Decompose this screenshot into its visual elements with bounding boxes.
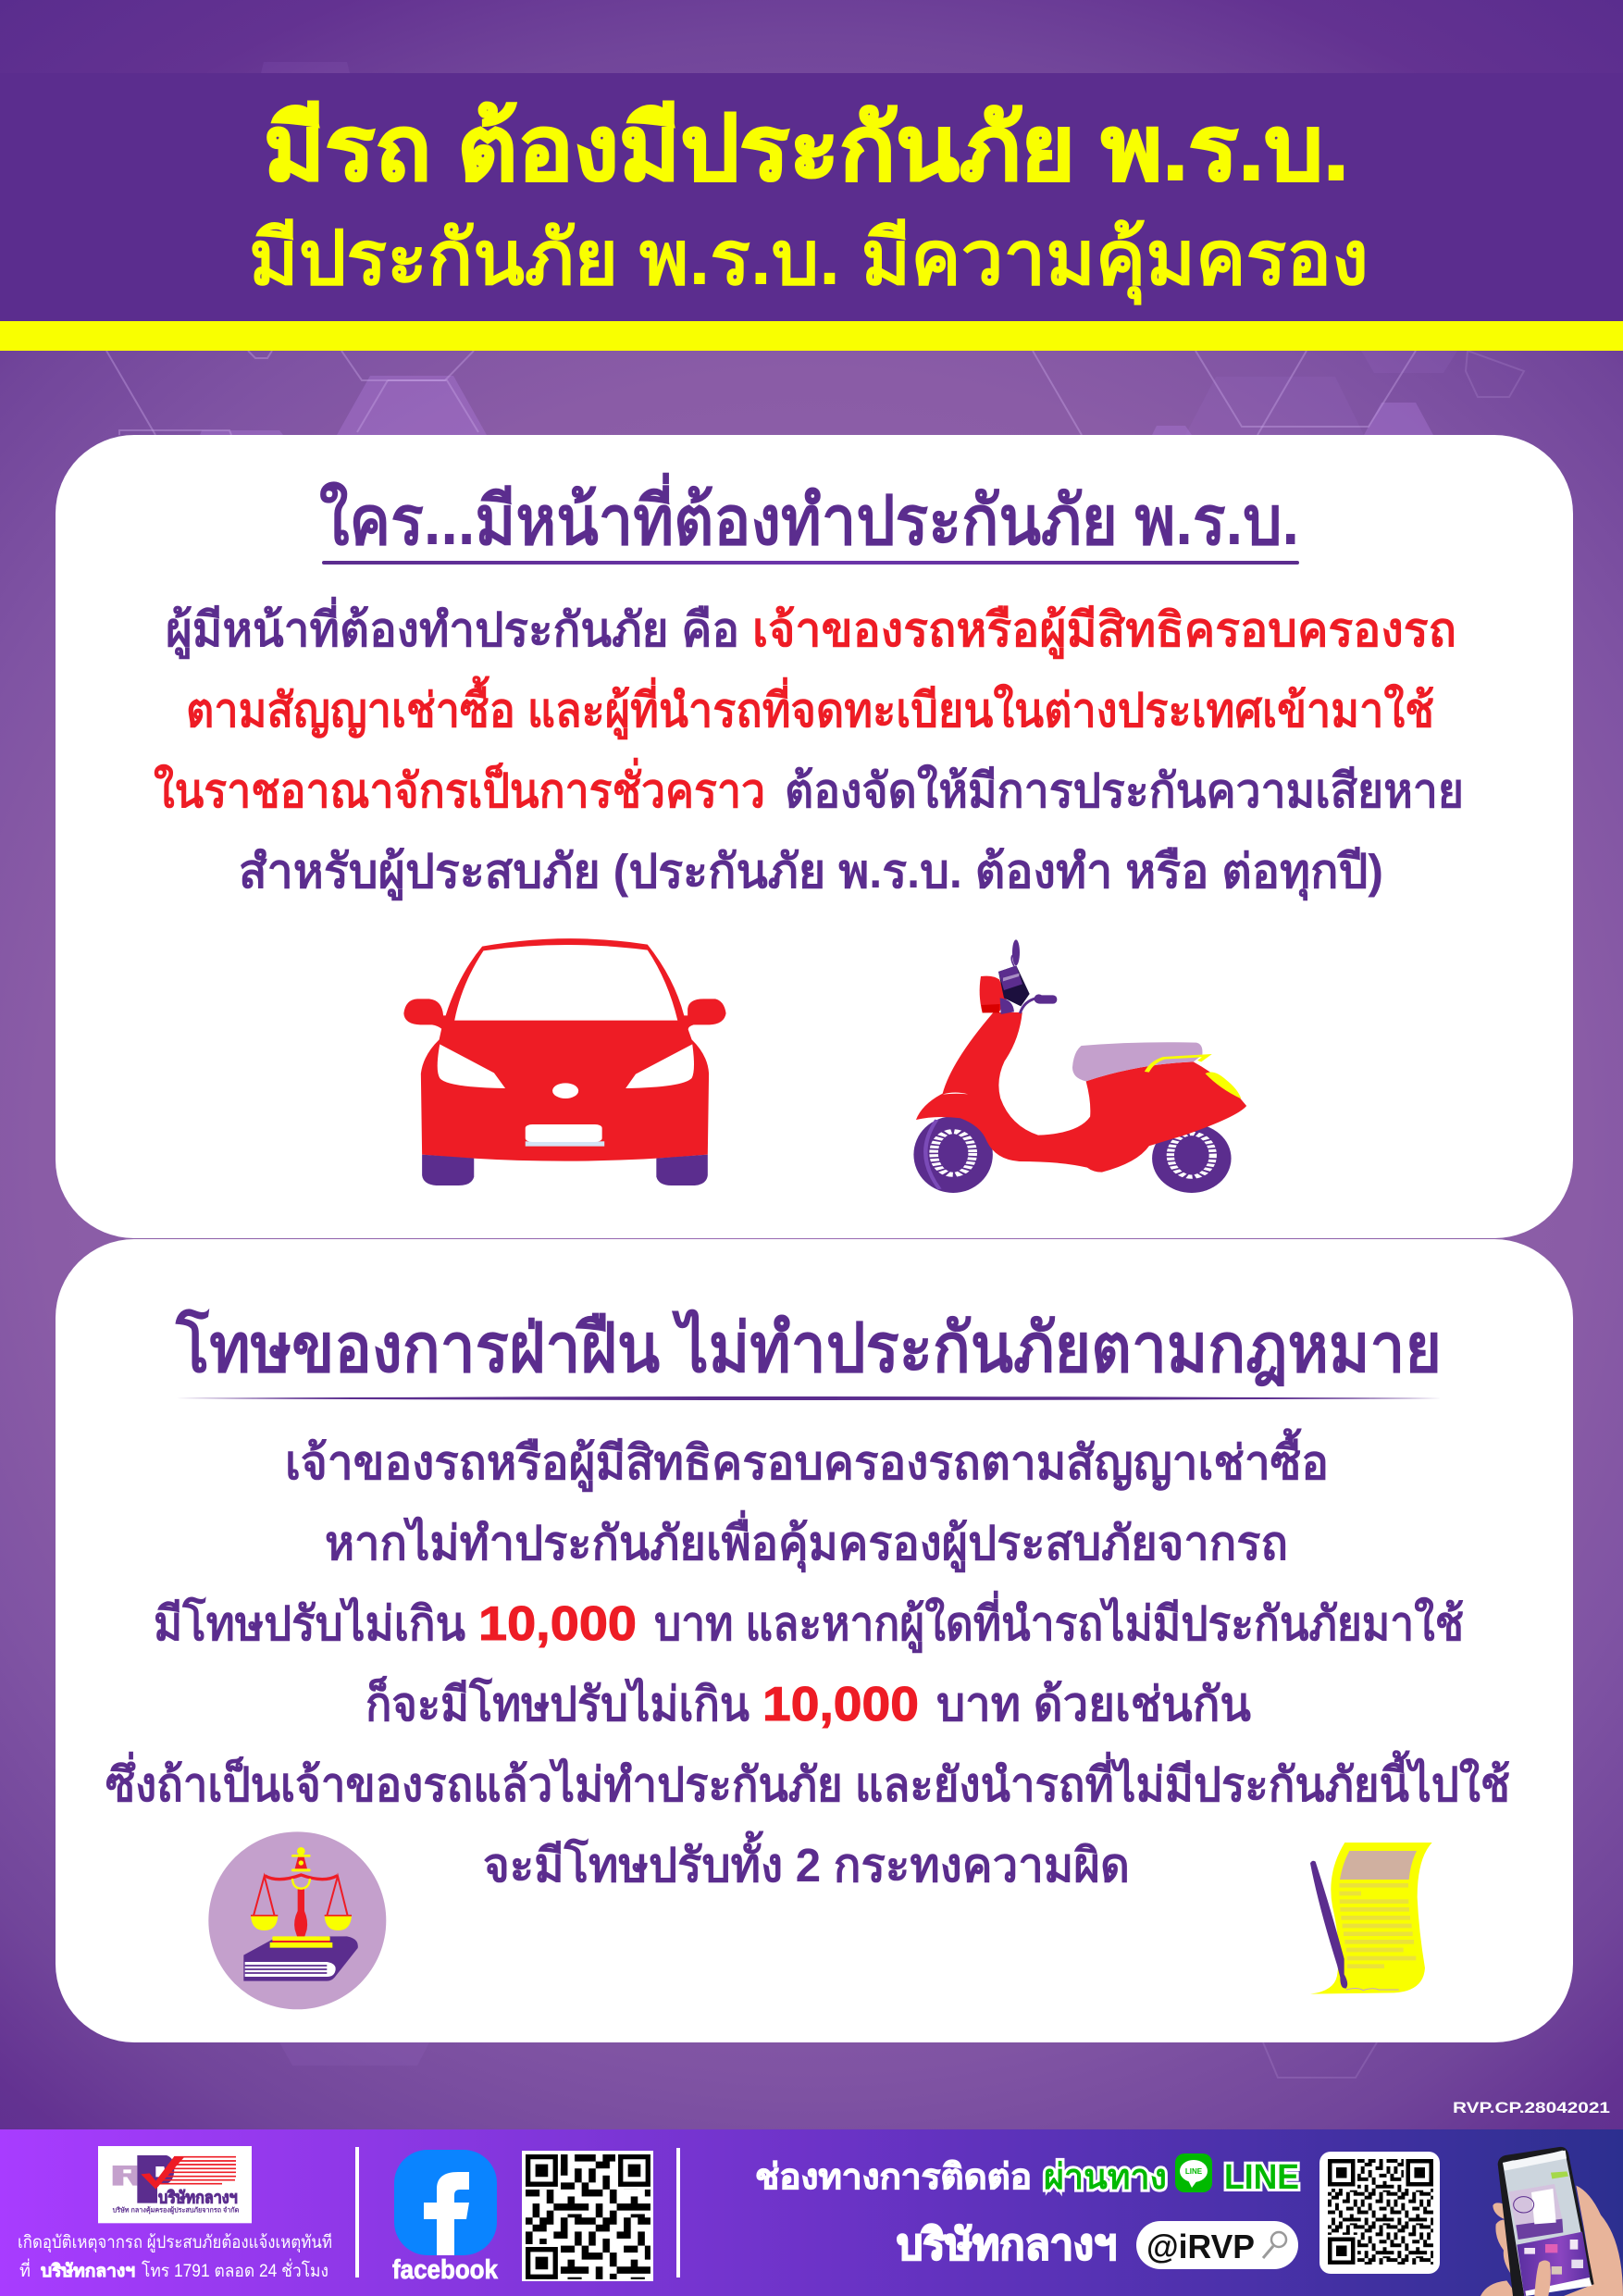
emergency notice	[18, 2232, 332, 2281]
body text: penalties: เจ้าของรถหรือผู้มีสิทธิครอบครองรถตามสัญญาเช่าซื้อ	[285, 1428, 1329, 1493]
body text: penalties: หากไม่ทำประกันภัยเพื่อคุ้มครองผู้ประสบภัยจากรถ	[325, 1510, 1288, 1573]
body text: who: เจ้าของรถหรือผู้มีสิทธิครอบครองรถ	[752, 603, 1456, 660]
phone in hand	[1481, 2147, 1623, 2296]
body text: who: ในราชอาณาจักรเป็นการชั่วคราว	[154, 758, 765, 817]
icon: document and pen	[1310, 1843, 1432, 1994]
icon: facebook	[392, 2150, 499, 2285]
body text: penalties: ซึ่งถ้าเป็นเจ้าของรถแล้วไม่ทำประกันภัย และยังนำรถที่ไม่มีประกันภัยนี้ไปใช้	[105, 1750, 1510, 1811]
body text: penalties: บาท และหากผู้ใดที่นำรถไม่มีประกันภัยมาใช้	[654, 1591, 1464, 1654]
emergency notice: โทร 1791 ตลอด 24 ชั่วโมง	[142, 2258, 328, 2281]
yellow stripe	[0, 321, 1623, 351]
panel: who must insure	[56, 435, 1573, 1238]
footer bar	[0, 2129, 1623, 2296]
body text: who: ต้องจัดให้มีการประกันความเสียหาย	[785, 763, 1464, 817]
icon: LINE: LINE	[1185, 2167, 1203, 2176]
body text: penalties: 10,000	[478, 1597, 637, 1651]
LINE id search pill: @iRVP	[1146, 2228, 1255, 2265]
emergency notice: ที่	[19, 2258, 31, 2281]
QR code: facebook	[522, 2151, 653, 2281]
logo: บริษัท กลางคุ้มครองผู้ประสบภัยจากรถ จำกัด	[113, 2205, 240, 2215]
icon: scales of justice on book	[208, 1831, 386, 2009]
icon: car	[403, 938, 726, 1185]
heading: who: ใคร...มีหน้าที่ต้องทำประกันภัย พ.ร.บ.	[319, 472, 1299, 559]
body text: who: สำหรับผู้ประสบภัย (ประกันภัย พ.ร.บ. ต้องทำ หรือ ต่อทุกปี)	[239, 845, 1383, 901]
body text: penalties: ก็จะมีโทษปรับไม่เกิน	[365, 1676, 750, 1731]
heading underline	[176, 1396, 1442, 1400]
subtitle: มีประกันภัย พ.ร.บ. มีความคุ้มครอง	[249, 217, 1369, 305]
body text: who	[154, 597, 1464, 901]
heading: penalties: โทษของการฝ่าฝืน ไม่ทำประกันภัยตามกฎหมาย	[175, 1308, 1442, 1386]
hexagon pattern	[106, 62, 1524, 2078]
emergency notice: บริษัทกลางฯ	[41, 2262, 135, 2281]
company name: บริษัทกลางฯ	[897, 2220, 1117, 2268]
contact channel heading: ช่องทางการติดต่อ	[755, 2158, 1032, 2197]
logo: บริษัทกลางฯ	[158, 2189, 238, 2207]
icon: scooter	[913, 939, 1246, 1193]
LINE id search pill	[1136, 2221, 1298, 2269]
body text: who: ตามสัญญาเช่าซื้อ และผู้ที่นำรถที่จดทะเบียนในต่างประเทศเข้ามาใช้	[186, 676, 1434, 740]
top band	[0, 73, 1623, 321]
divider	[676, 2148, 680, 2277]
body text: penalties: บาท ด้วยเช่นกัน	[936, 1678, 1251, 1731]
document code: RVP.CP.28042021	[1453, 2099, 1610, 2116]
body text: penalties: จะมีโทษปรับทั้ง 2 กระทงความผิด	[483, 1831, 1130, 1892]
title: มีรถ ต้องมีประกันภัย พ.ร.บ.	[264, 97, 1349, 199]
divider	[355, 2147, 359, 2277]
body text: penalties: มีโทษปรับไม่เกิน	[154, 1595, 465, 1650]
icon: LINE	[1175, 2153, 1212, 2192]
heading underline	[322, 561, 1299, 565]
panel: penalties	[56, 1239, 1573, 2042]
LINE label: LINE	[1224, 2158, 1299, 2197]
icon: facebook: facebook	[392, 2255, 499, 2285]
body text: who: ผู้มีหน้าที่ต้องทำประกันภัย คือ	[166, 597, 739, 660]
QR code: LINE	[1319, 2152, 1440, 2274]
via LINE text: ผ่านทาง	[1044, 2158, 1167, 2197]
logo	[98, 2146, 252, 2223]
emergency notice: เกิดอุบัติเหตุจากรถ ผู้ประสบภัยต้องแจ้งเหตุทันที	[18, 2232, 332, 2253]
body text: penalties	[105, 1428, 1510, 1892]
body text: penalties: 10,000	[762, 1678, 919, 1731]
